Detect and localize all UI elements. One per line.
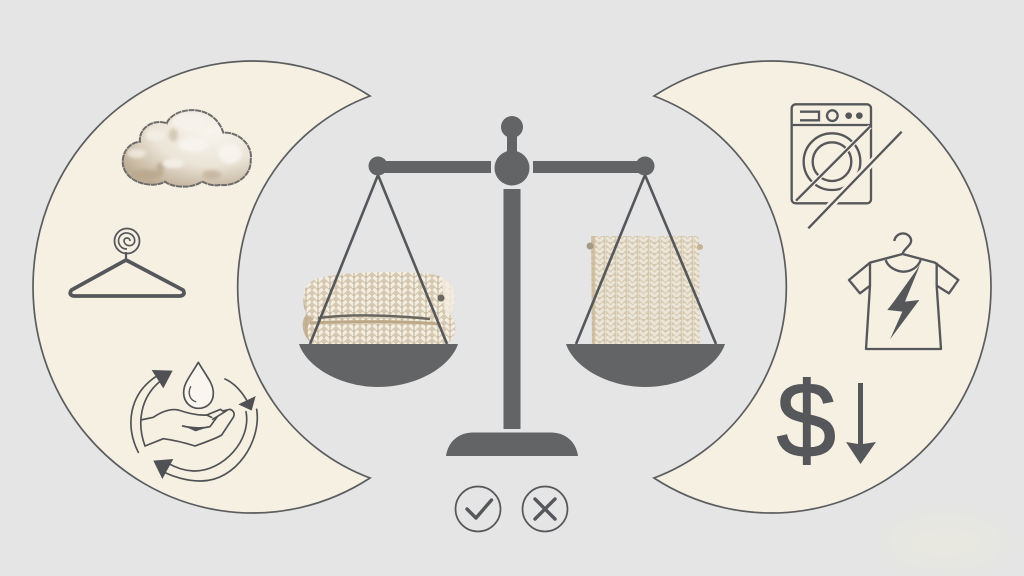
crescent shape left [33, 61, 370, 513]
icon: hand, water drop and cycle arrows [131, 362, 257, 481]
balance scale [299, 116, 725, 456]
faint cream patch [890, 522, 1000, 562]
base [446, 432, 578, 456]
drop highlight [189, 387, 196, 402]
left pan [299, 344, 458, 387]
icon: check mark in circle [456, 486, 500, 532]
thumb shadow [185, 427, 207, 431]
right pan [566, 344, 725, 387]
post [504, 189, 520, 429]
open hand [141, 409, 234, 446]
folded knit stack on left pan [303, 272, 455, 344]
left beam ball [368, 156, 388, 176]
beam right [533, 161, 645, 173]
beam left [378, 161, 491, 173]
icon: hanger with spiral hook [70, 228, 184, 296]
hub with top knob [494, 116, 530, 186]
icon: crossed-out washing machine [792, 104, 902, 228]
left strings [310, 175, 447, 344]
panel: left crescent [33, 61, 370, 513]
icon: down arrow [846, 383, 876, 464]
panel: right crescent [654, 61, 991, 513]
cycle arcs [131, 375, 257, 481]
right beam ball [636, 156, 654, 176]
icon: dollar sign: $ [776, 360, 836, 480]
icon: cross mark in circle [522, 486, 568, 532]
cycle arrowheads [152, 370, 256, 479]
right strings [576, 175, 716, 344]
water drop [184, 362, 213, 408]
crescent shape right [654, 61, 991, 513]
icon: t-shirt on hanger with lightning bolt [849, 233, 958, 349]
knit panel on right pan [586, 236, 703, 344]
icon: wool cloud [123, 110, 251, 187]
